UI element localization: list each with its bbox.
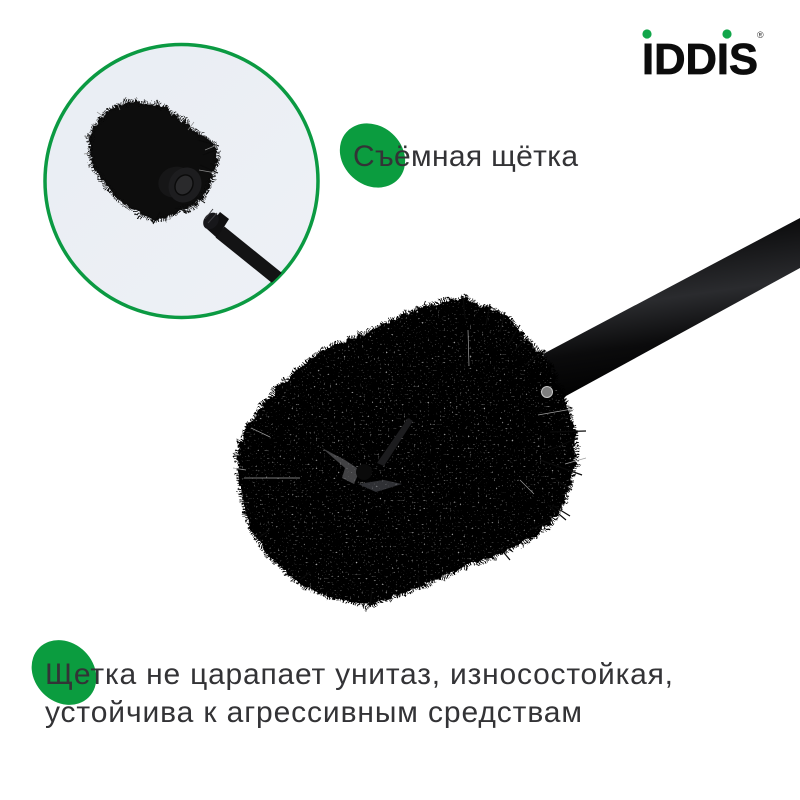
text block: brush properties: Щетка не царапает унитаз, износостойкая, (45, 658, 673, 691)
callout blob: durability (18, 627, 110, 718)
text block: brush properties: устойчива к агрессивным средствам (45, 696, 582, 729)
main brush head (233, 295, 586, 610)
panel: inset photo of removable brush (45, 44, 318, 318)
callout blob: removable brush (327, 110, 418, 201)
icon: handle with threaded tip (200, 209, 282, 282)
screw (542, 386, 552, 398)
speckled bristle ends (235, 295, 580, 610)
stray bristles (233, 330, 586, 494)
bristle tips (238, 298, 575, 605)
centre hub highlights (322, 418, 413, 492)
logo: IDDIS: IDDIS (642, 35, 758, 84)
icon: inset brush head (84, 102, 219, 224)
text block: brush properties (45, 658, 673, 729)
bristle body (238, 298, 575, 605)
icon: threaded socket (158, 167, 202, 202)
label: removable brush: Съёмная щётка (353, 140, 578, 173)
main handle (543, 218, 800, 402)
logo: IDDIS: ® (757, 30, 764, 40)
